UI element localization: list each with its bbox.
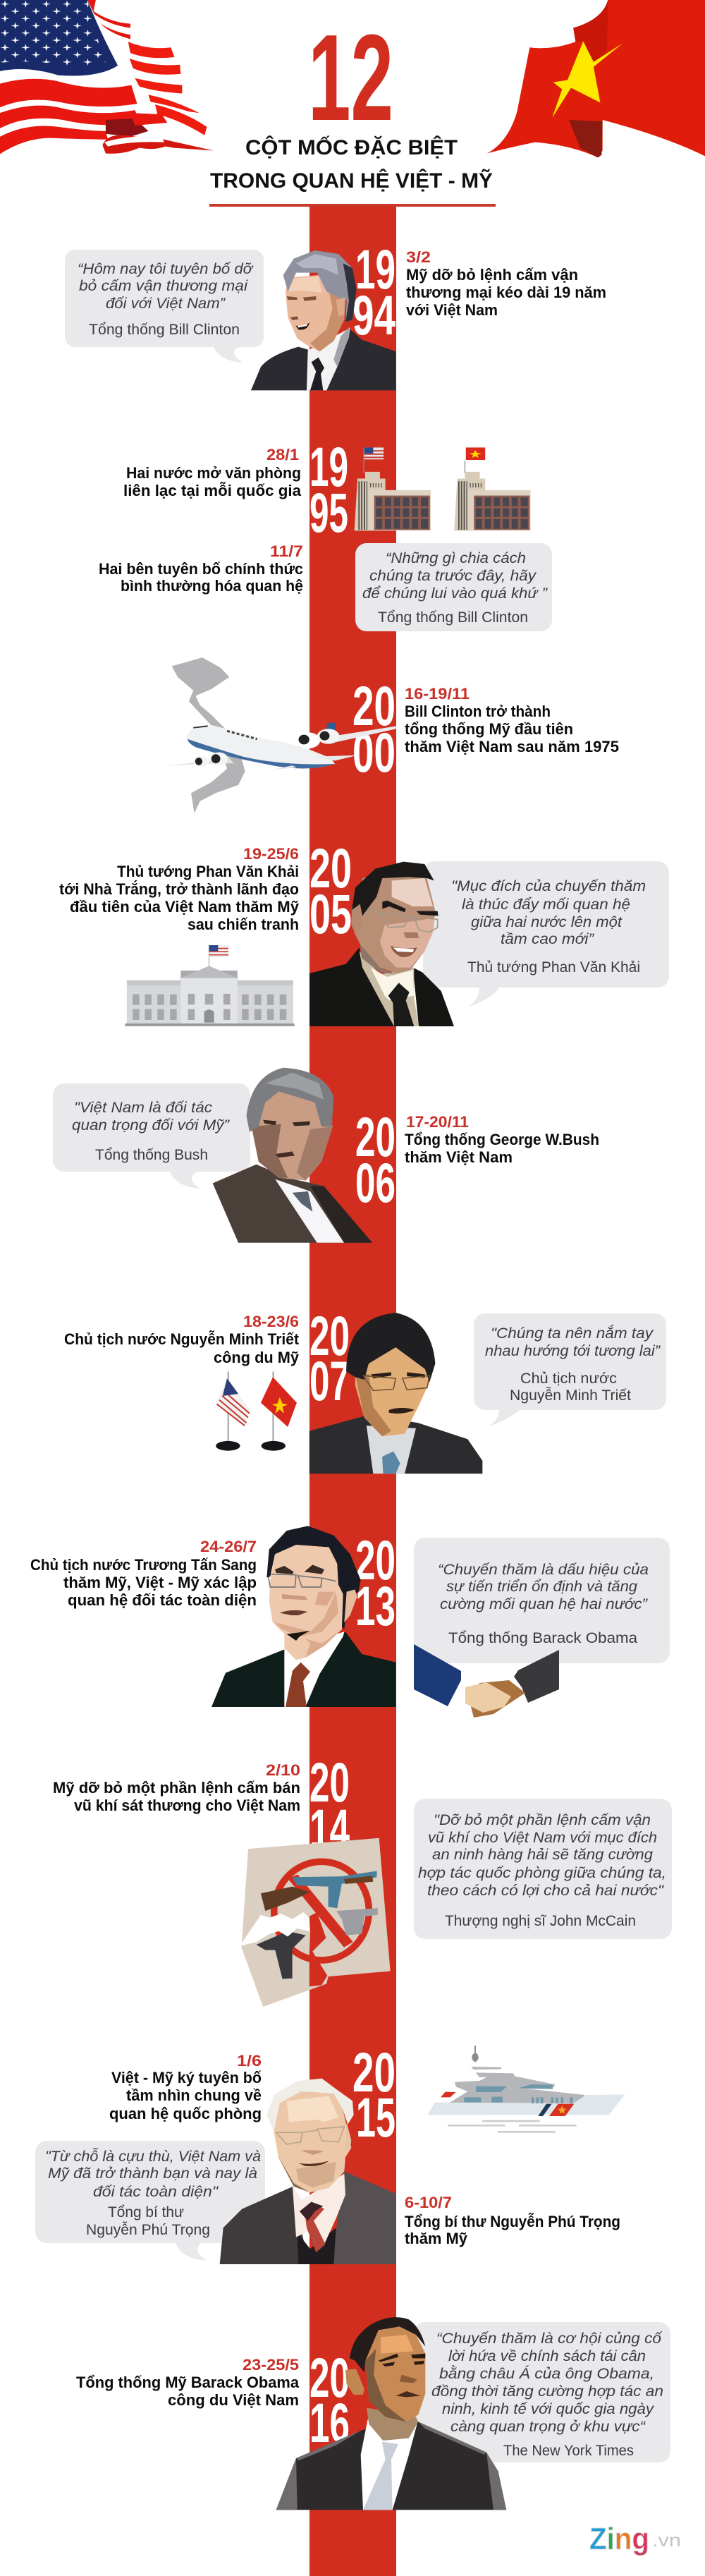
quote bubble: Mỹ đã trở thành bạn và nay là [48, 2165, 257, 2182]
event text: 3/2 [406, 248, 431, 266]
icon: White House [125, 945, 295, 1026]
year: 05 [309, 882, 352, 945]
panel: 2015 [35, 2041, 625, 2264]
quote bubble: bằng châu Á của ông Obama, [439, 2366, 654, 2382]
quote bubble: “Những gì chia cách [386, 550, 526, 566]
year: 19 [355, 238, 396, 300]
event text: sau chiến tranh [188, 916, 299, 933]
building: Vietnam office [454, 447, 531, 530]
event text: công du Mỹ [214, 1349, 300, 1366]
quote bubble: cường mối quan hệ hai nước” [440, 1596, 648, 1612]
event text: 11/7: 11/7 [270, 542, 303, 560]
event text: quan hệ đối tác toàn diện [68, 1591, 257, 1609]
quote bubble: giữa hai nước lên một [471, 914, 623, 930]
year [352, 2041, 396, 2149]
quote bubble [423, 861, 669, 1007]
icon: airplane [166, 723, 396, 770]
event text: tổng thống Mỹ đầu tiên [405, 720, 573, 738]
quote bubble: Tổng thống Barack Obama [448, 1630, 637, 1646]
quote bubble: đối tác toàn diện" [93, 2184, 219, 2200]
event text [406, 248, 606, 319]
event text: 6-10/7: Tổng bí thư Nguyễn Phú Trọng [405, 2213, 620, 2230]
quote bubble: “Chuyến thăm là cơ hội củng cố [436, 2331, 663, 2347]
quote bubble: Tổng thống Bill Clinton [378, 609, 528, 626]
icon: ship [428, 2046, 625, 2133]
quote bubble: Chủ tịch nước [520, 1371, 617, 1387]
quote bubble: Nguyễn Minh Triết [510, 1387, 631, 1404]
event text: vũ khí sát thương cho Việt Nam [74, 1797, 300, 1814]
icon: torn arms-ban poster [240, 1838, 391, 2007]
year: 20 [309, 2346, 350, 2409]
year: 07 [309, 1349, 350, 1412]
event text: 6-10/7: thăm Mỹ [405, 2230, 468, 2247]
event text: 28/1: 28/1 [266, 446, 299, 463]
year: 20 [309, 837, 352, 899]
quote bubble: "Từ chỗ là cựu thù, Việt Nam và [45, 2149, 261, 2165]
event text: thăm Việt Nam sau năm 1975 [405, 738, 619, 755]
title: TRONG QUAN HỆ VIỆT - MỸ [210, 169, 493, 193]
event text [76, 2356, 300, 2409]
event text: 1/6: quan hệ quốc phòng [109, 2105, 262, 2122]
event text: với Việt Nam [406, 301, 498, 319]
portrait: Phan Văn Khải [309, 862, 454, 1026]
quote bubble: "Chúng ta nên nắm tay [491, 1325, 654, 1342]
event text: thăm Việt Nam [405, 1148, 513, 1166]
quote bubble [474, 1313, 666, 1427]
year [352, 674, 396, 784]
quote bubble: Tổng thống Bill Clinton [89, 322, 240, 338]
event text: 11/7 [99, 542, 303, 595]
event text: 6-10/7 [405, 2194, 620, 2247]
year [309, 837, 352, 945]
year: 20 [355, 1105, 396, 1168]
quote bubble: chúng ta trước đây, hãy [369, 568, 537, 584]
event text: 1/6 [109, 2052, 262, 2122]
event text [64, 1313, 300, 1366]
panel: 1994 [65, 238, 606, 390]
quote bubble: quan trọng đối với Mỹ” [72, 1117, 230, 1134]
panel: 2000 [166, 657, 619, 813]
flag: United States [0, 0, 214, 154]
quote bubble: theo cách có lợi cho cả hai nước" [427, 1883, 665, 1899]
year: 06 [355, 1151, 396, 1214]
panel: 2016 [76, 2317, 670, 2510]
flag: Vietnam [487, 0, 705, 157]
event text: 17-20/11 [406, 1113, 469, 1131]
portrait: Bill Clinton [251, 250, 396, 390]
quote bubble: vũ khí cho Việt Nam với mục đích [428, 1830, 657, 1846]
event text: 2/10 [266, 1761, 300, 1779]
portrait: Barack Obama [276, 2317, 506, 2510]
building: US office [355, 447, 431, 530]
quote bubble [35, 2141, 265, 2261]
event text [59, 845, 300, 933]
year: 13 [355, 1574, 396, 1637]
logo: Zing.vn [589, 2522, 681, 2556]
quote bubble [53, 1083, 250, 1189]
event text: 28/1: Hai nước mở văn phòng [126, 464, 301, 482]
event text: 23-25/5 [243, 2356, 299, 2374]
event text: 28/1: liên lạc tại mỗi quốc gia [123, 482, 302, 499]
quote bubble: Nguyễn Phú Trọng [86, 2222, 210, 2238]
event text: Mỹ dỡ bỏ một phần lệnh cấm bán [53, 1779, 300, 1797]
quote bubble [414, 2322, 670, 2462]
panel: 2005 [59, 837, 669, 1026]
timeline band [309, 206, 396, 2576]
year: 20 [352, 674, 396, 737]
panel: 2014 [53, 1751, 672, 2007]
event text [30, 1538, 257, 1609]
event text: 1/6: tầm nhìn chung về [126, 2086, 262, 2104]
panel: 2006 [53, 1068, 599, 1243]
year: 00 [352, 721, 396, 784]
event text: 11/7: bình thường hóa quan hệ [121, 577, 303, 595]
year: 20 [355, 1529, 396, 1591]
year: 14 [309, 1797, 350, 1860]
quote bubble: bỏ cấm vận thương mại [79, 278, 248, 294]
quote bubble: The New York Times [503, 2443, 634, 2459]
title: CỘT MỐC ĐẶC BIỆT [245, 135, 458, 159]
year [352, 238, 396, 346]
quote bubble: “Hôm nay tôi tuyên bố dỡ [78, 261, 254, 277]
year: 19 [309, 435, 348, 498]
quote bubble: ninh, kinh tế với quốc gia ngày [442, 2401, 655, 2417]
event text: công du Việt Nam [168, 2391, 299, 2409]
quote bubble: đối với Việt Nam” [106, 296, 226, 312]
icon: yellow star [552, 42, 623, 118]
year [309, 1751, 350, 1860]
year: 16 [309, 2391, 350, 2454]
header [0, 0, 705, 207]
quote bubble: Tổng thống Bush [95, 1147, 208, 1163]
quote bubble [414, 1538, 670, 1663]
year: 95 [309, 481, 348, 544]
quote bubble: "Việt Nam là đối tác [74, 1100, 213, 1116]
panel: 1995 [99, 435, 552, 631]
event text: Chủ tịch nước Nguyễn Minh Triết [64, 1330, 300, 1348]
event text [405, 685, 619, 755]
event text: đầu tiên của Việt Nam thăm Mỹ [70, 898, 300, 916]
event text: thăm Mỹ, Việt - Mỹ xác lập [63, 1574, 257, 1591]
quote bubble: nhau hướng tới tương lai” [485, 1343, 661, 1359]
event text: 16-19/11 [405, 685, 470, 703]
event text: Mỹ dỡ bỏ lệnh cấm vận [406, 266, 578, 284]
year [309, 1304, 350, 1412]
quote bubble: lời hứa về chính sách tái cân [448, 2348, 646, 2364]
event text: 1/6: 1/6 [237, 2052, 262, 2070]
title [210, 135, 493, 193]
logo: Zing.vn: Zing [589, 2522, 649, 2556]
title number: 12 [308, 8, 393, 146]
quote bubble: hợp tác quốc phòng giữa chúng ta, [418, 1865, 666, 1881]
quote bubble: là thúc đẩy mối quan hệ [462, 897, 630, 913]
event text: Tổng thống George W.Bush [405, 1131, 599, 1148]
quote bubble: Tổng bí thư [108, 2204, 184, 2220]
year: 94 [352, 284, 396, 346]
icon: handshake [414, 1644, 559, 1718]
quote bubble: "Dỡ bỏ một phần lệnh cấm vận [434, 1812, 651, 1828]
event text: 11/7: Hai bên tuyên bố chính thức [99, 560, 303, 578]
event text: 1/6: Việt - Mỹ ký tuyên bố [111, 2069, 262, 2086]
icon: desk flags [216, 1372, 297, 1451]
portrait: George W. Bush [213, 1068, 372, 1243]
event text [405, 1113, 599, 1166]
panel: 2007 [64, 1304, 666, 1474]
year: 20 [309, 1304, 350, 1367]
portrait: Nguyễn Minh Triết [309, 1313, 482, 1474]
year [309, 2346, 350, 2454]
quote bubble: "Mục đích của chuyến thăm [451, 878, 646, 894]
event text: 19-25/6 [243, 845, 299, 863]
map: Vietnam [172, 657, 245, 813]
quote bubble [65, 250, 264, 363]
event text: 28/1 [123, 446, 302, 499]
logo: Zing.vn: .vn [652, 2529, 681, 2551]
year [309, 435, 348, 544]
year: 20 [352, 2041, 396, 2103]
event text: Tổng thống Mỹ Barack Obama [76, 2374, 300, 2391]
panel: 2013 [30, 1526, 670, 1718]
event text: Thủ tướng Phan Văn Khải [117, 863, 299, 880]
quote bubble: an ninh hàng hải sẽ tăng cường [432, 1847, 653, 1863]
quote bubble: càng quan trọng ở khu vực“ [450, 2419, 646, 2435]
quote bubble: Thượng nghị sĩ John McCain [445, 1913, 636, 1929]
event text: tới Nhà Trắng, trở thành lãnh đạo [59, 880, 299, 898]
event text: Bill Clinton trở thành [405, 703, 551, 720]
portrait: Nguyễn Phú Trọng [220, 2079, 396, 2264]
quote bubble: “Chuyến thăm là dấu hiệu của [438, 1562, 649, 1578]
event text: 6-10/7: 6-10/7 [405, 2194, 452, 2211]
quote bubble [355, 543, 552, 631]
year [355, 1105, 396, 1214]
event text: 24-26/7 [200, 1538, 257, 1555]
icon: buildings [355, 447, 531, 530]
quote bubble: Thủ tướng Phan Văn Khải [467, 959, 640, 976]
quote bubble: để chúng lui vào quá khứ ” [362, 585, 548, 602]
event text [53, 1761, 300, 1814]
portrait: Trương Tấn Sang [212, 1526, 396, 1707]
quote bubble: đồng thời tăng cường hợp tác an [431, 2383, 663, 2400]
event text: thương mại kéo dài 19 năm [406, 284, 606, 301]
event text: 18-23/6 [243, 1313, 299, 1330]
year: 15 [356, 2086, 396, 2149]
event text: Chủ tịch nước Trương Tấn Sang [30, 1556, 257, 1574]
year [355, 1529, 396, 1637]
quote bubble: sự tiến triển ổn định và tăng [446, 1579, 637, 1595]
quote bubble: tầm cao mới” [501, 931, 594, 947]
quote bubble [414, 1799, 672, 1939]
year: 20 [309, 1751, 350, 1813]
